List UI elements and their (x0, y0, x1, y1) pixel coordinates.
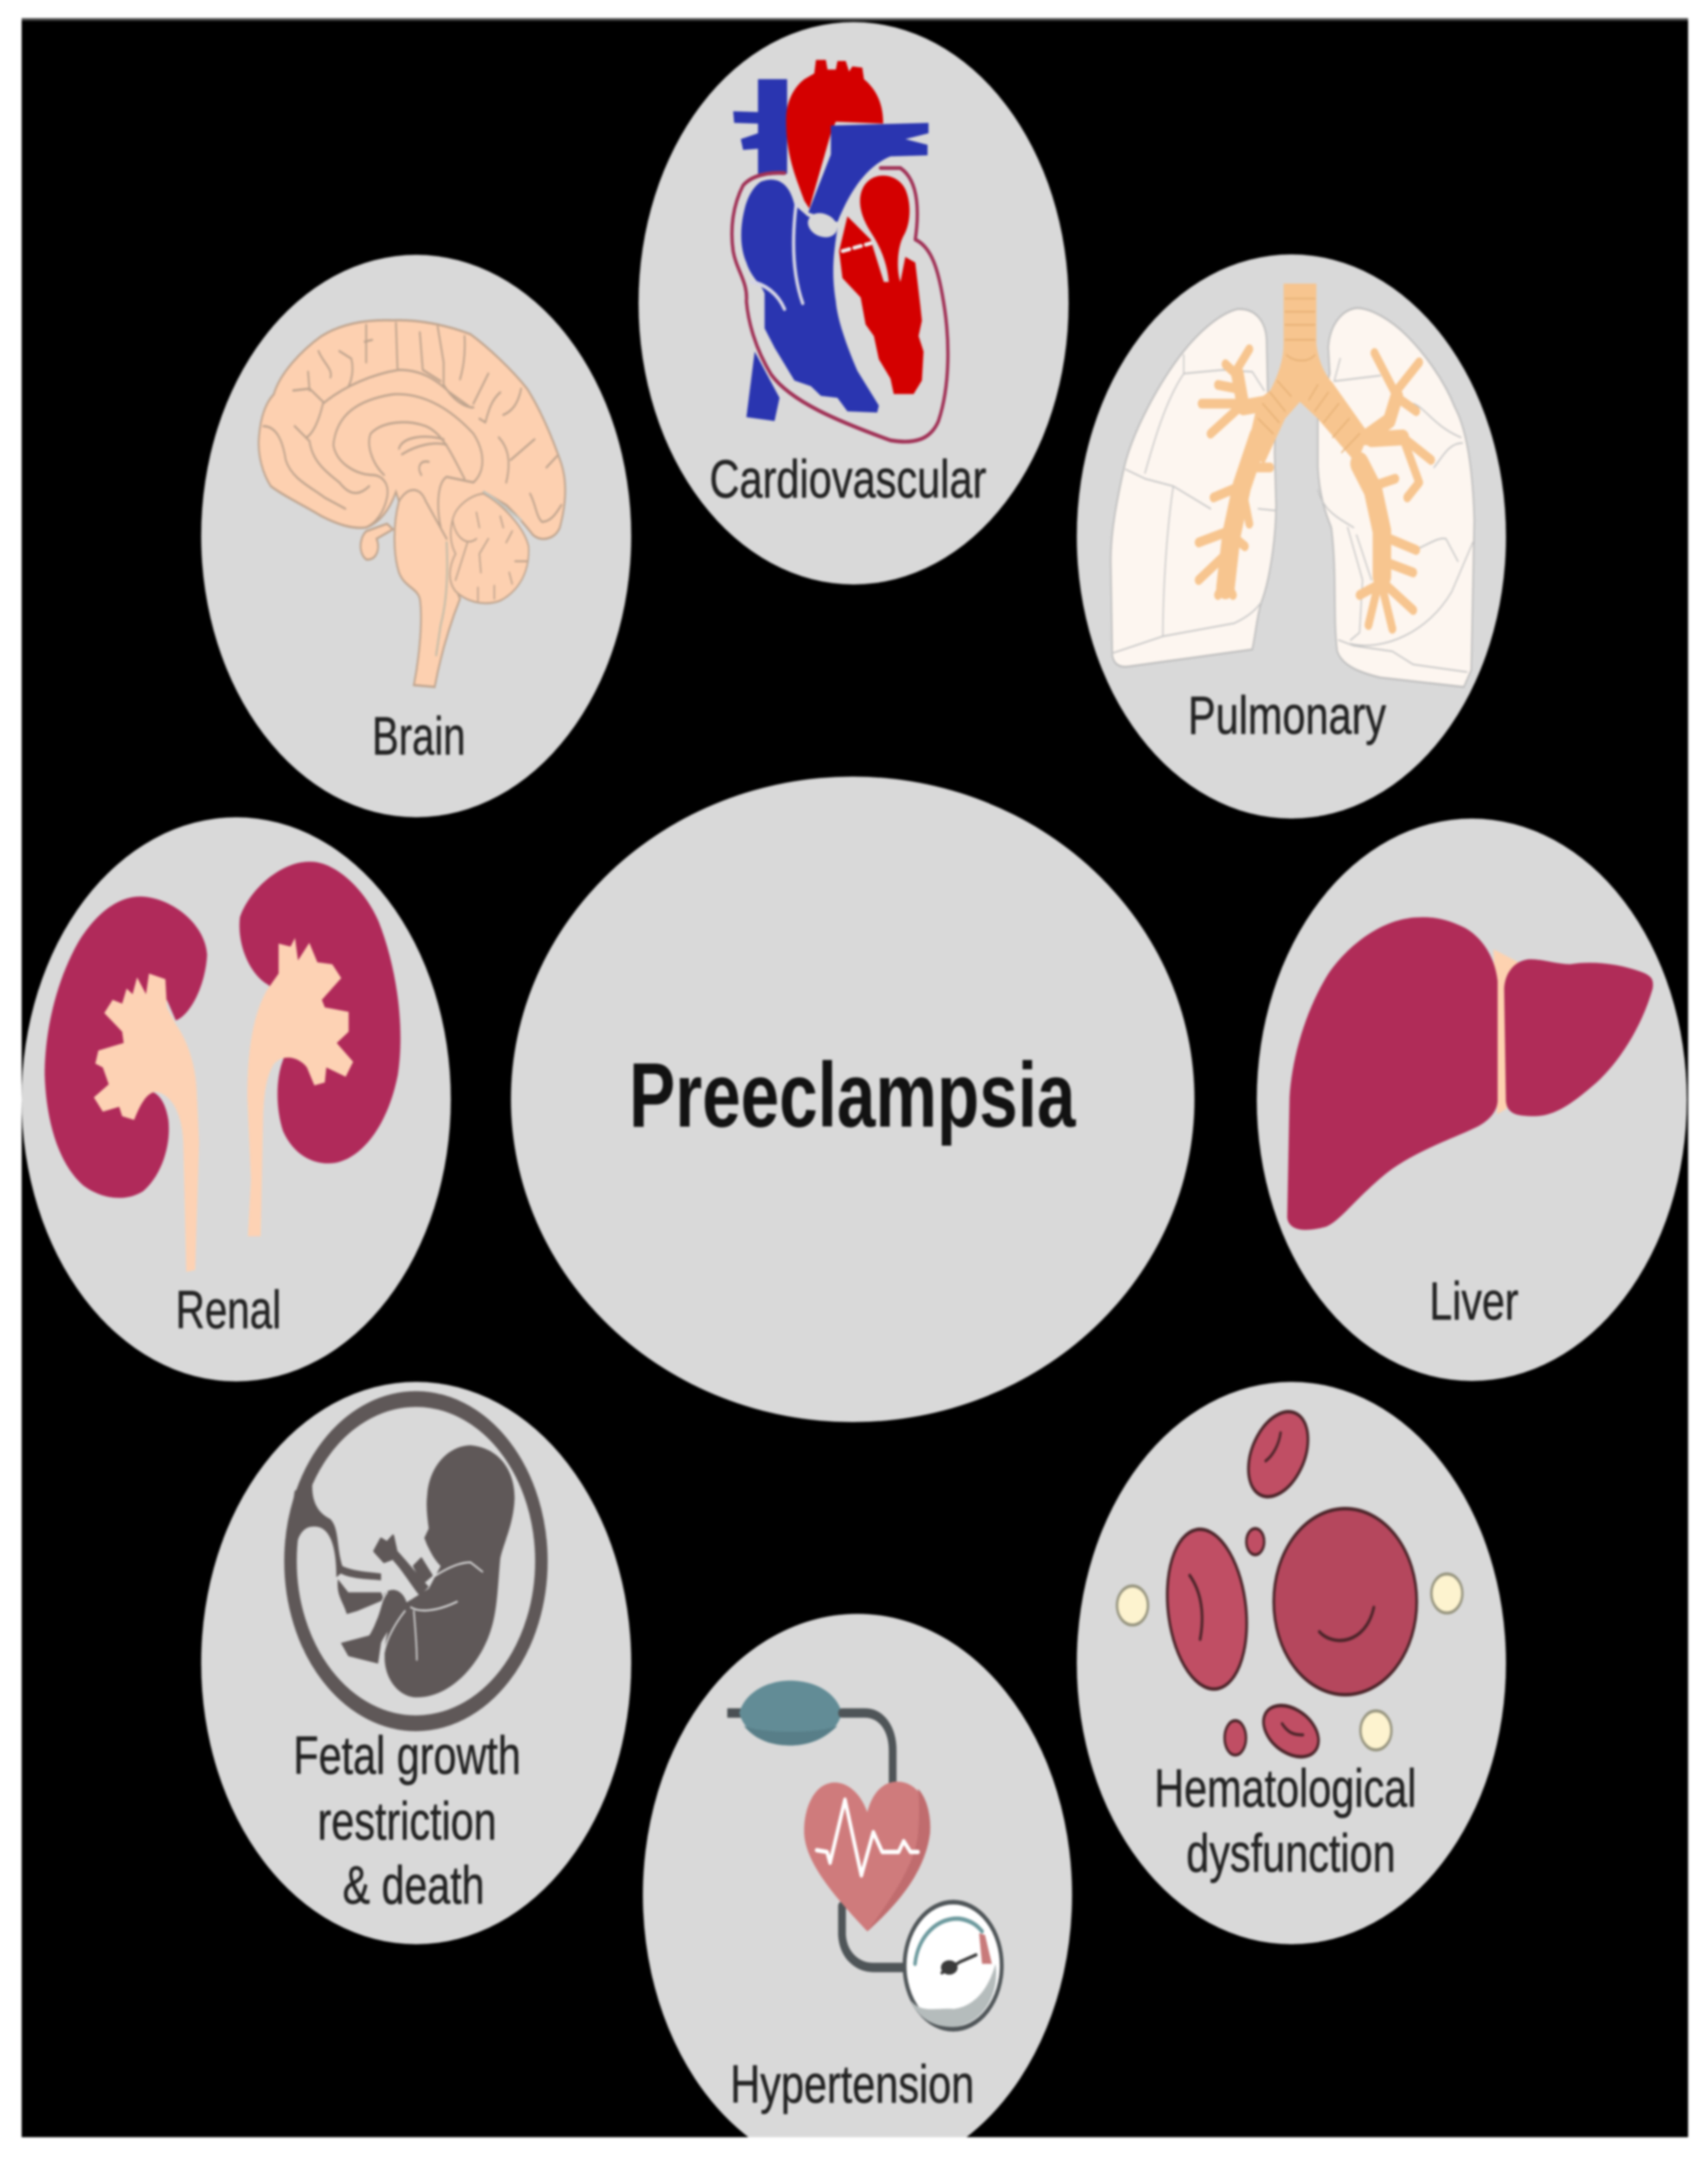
panel: hematological dysfunction (1076, 1382, 1506, 1944)
label: Liver: Liver (1429, 1272, 1519, 1332)
icon: kidneys (45, 862, 401, 1272)
title: Preeclampsia (629, 1044, 1076, 1146)
label: Hematological dysfunction (1154, 1759, 1416, 1884)
label: Pulmonary: Pulmonary (1188, 686, 1386, 746)
panel: liver (1256, 819, 1687, 1381)
panel: brain (201, 254, 632, 817)
label: Hematological dysfunction: Hematological (1154, 1759, 1416, 1819)
label: Fetal growth restriction and death: Fetal growth (293, 1726, 521, 1786)
panel: hypertension (643, 1614, 1072, 2137)
icon: blood cells (1117, 1397, 1462, 1767)
label: Fetal growth restriction and death: & death (343, 1856, 485, 1916)
label: Brain: Brain (372, 707, 466, 767)
icon: lungs (1111, 284, 1474, 687)
label: Fetal growth restriction and death (293, 1726, 521, 1916)
panel: fetal growth restriction and death (201, 1382, 632, 1944)
label: Renal: Renal (176, 1281, 281, 1340)
icon: brain (259, 320, 565, 687)
label: Hypertension: Hypertension (730, 2055, 974, 2115)
panel: renal (22, 817, 451, 1381)
icon: heart (732, 60, 948, 441)
panel: cardiovascular (639, 22, 1069, 585)
icon: liver (1287, 917, 1653, 1230)
panel: central Preeclampsia disc (510, 777, 1194, 1423)
icon: blood pressure cuff with heart and gauge (728, 1680, 1002, 2029)
icon: fetus in womb (286, 1399, 542, 1724)
label: Cardiovascular: Cardiovascular (710, 450, 986, 510)
panel: pulmonary (1076, 254, 1506, 819)
label: Hematological dysfunction: dysfunction (1186, 1824, 1396, 1884)
label: Fetal growth restriction and death: restriction (318, 1792, 497, 1852)
